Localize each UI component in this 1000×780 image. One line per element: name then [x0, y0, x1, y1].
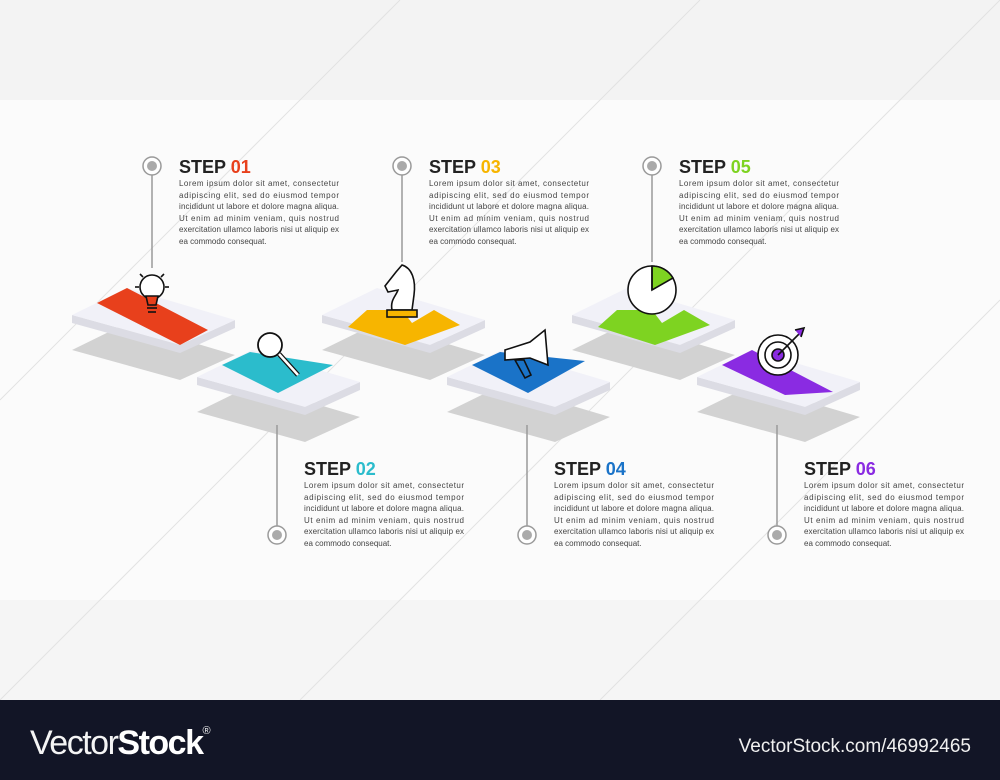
text: step 3: adipiscing elit, sed do eiusmod tempor — [429, 191, 589, 200]
footer bar: VectorStock.com/46992465 — [739, 736, 971, 757]
text: step 4: exercitation ullamco laboris nisi ut aliquip ex — [554, 527, 714, 536]
text: step 1: incididunt ut labore et dolore magna aliqua. — [179, 202, 339, 211]
text: step 1: Ut enim ad minim veniam, quis nostrud — [179, 214, 339, 223]
text: step 3: incididunt ut labore et dolore magna aliqua. — [429, 202, 589, 211]
text: step 5 — [679, 157, 839, 246]
text: step 3: ea commodo consequat. — [429, 237, 517, 246]
text: step 1: exercitation ullamco laboris nisi ut aliquip ex — [179, 225, 339, 234]
text: step 1: Lorem ipsum dolor sit amet, consectetur — [179, 179, 339, 188]
text: step 1: ea commodo consequat. — [179, 237, 267, 246]
text: step 5: Lorem ipsum dolor sit amet, consectetur — [679, 179, 839, 188]
text: step 3 — [429, 157, 589, 246]
text: step 4: Lorem ipsum dolor sit amet, consectetur — [554, 481, 714, 490]
text: step 5: adipiscing elit, sed do eiusmod tempor — [679, 191, 839, 200]
icon: target — [758, 328, 804, 375]
footer bar: VectorStock — [30, 724, 202, 762]
tile: step 3 — [322, 288, 485, 380]
text: step 3: exercitation ullamco laboris nisi ut aliquip ex — [429, 225, 589, 234]
text: step 2: Ut enim ad minim veniam, quis nostrud — [304, 516, 464, 525]
text: step 2 — [304, 459, 464, 548]
tile: step 5 — [572, 288, 735, 380]
text: step 5: Ut enim ad minim veniam, quis nostrud — [679, 214, 839, 223]
icon: magnifier — [258, 333, 298, 375]
text: step 6: exercitation ullamco laboris nisi ut aliquip ex — [804, 527, 964, 536]
icon: lightbulb — [135, 274, 169, 312]
text: step 3: STEP 03 — [429, 157, 501, 177]
text: step 5: STEP 05 — [679, 157, 751, 177]
text: step 1: adipiscing elit, sed do eiusmod tempor — [179, 191, 339, 200]
text: step 5: ea commodo consequat. — [679, 237, 767, 246]
footer bar: ® — [202, 725, 210, 737]
tile: step 6 — [697, 350, 860, 442]
text: step 1 — [179, 157, 339, 246]
text: step 4: incididunt ut labore et dolore magna aliqua. — [554, 504, 714, 513]
tile: step 4 — [447, 350, 610, 442]
icon: clock — [628, 266, 676, 314]
text: step 1: STEP 01 — [179, 157, 251, 177]
text: step 2: exercitation ullamco laboris nisi ut aliquip ex — [304, 527, 464, 536]
text: step 6: Lorem ipsum dolor sit amet, consectetur — [804, 481, 964, 490]
text: step 2: incididunt ut labore et dolore magna aliqua. — [304, 504, 464, 513]
text: step 4: Ut enim ad minim veniam, quis nostrud — [554, 516, 714, 525]
icon: megaphone — [505, 330, 548, 378]
tile: step 2 — [197, 350, 360, 442]
text: step 6: ea commodo consequat. — [804, 539, 892, 548]
connectors — [143, 157, 786, 544]
text: step 6: STEP 06 — [804, 459, 876, 479]
text: step 5: incididunt ut labore et dolore magna aliqua. — [679, 202, 839, 211]
footer bar — [0, 700, 1000, 780]
text: step 4 — [554, 459, 714, 548]
text: step 3: Ut enim ad minim veniam, quis nostrud — [429, 214, 589, 223]
text: step 4: adipiscing elit, sed do eiusmod tempor — [554, 493, 714, 502]
text: step 2: ea commodo consequat. — [304, 539, 392, 548]
text: step 3: Lorem ipsum dolor sit amet, consectetur — [429, 179, 589, 188]
icon: chess knight — [385, 265, 417, 317]
text: step 2: STEP 02 — [304, 459, 376, 479]
text: step 6 — [804, 459, 964, 548]
text: step 2: Lorem ipsum dolor sit amet, consectetur — [304, 481, 464, 490]
text: step 5: exercitation ullamco laboris nisi ut aliquip ex — [679, 225, 839, 234]
text: step 6: Ut enim ad minim veniam, quis nostrud — [804, 516, 964, 525]
text: step 4: STEP 04 — [554, 459, 626, 479]
tile: step 1 — [72, 288, 235, 380]
text: step 6: adipiscing elit, sed do eiusmod tempor — [804, 493, 964, 502]
text: step 4: ea commodo consequat. — [554, 539, 642, 548]
text: step 2: adipiscing elit, sed do eiusmod tempor — [304, 493, 464, 502]
text: step 6: incididunt ut labore et dolore magna aliqua. — [804, 504, 964, 513]
